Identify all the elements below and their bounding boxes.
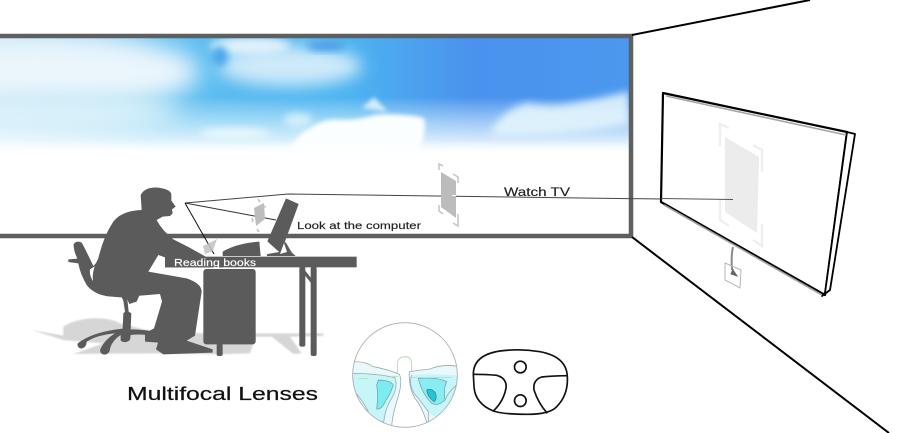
pedestal drawer — [203, 269, 256, 344]
room edges — [632, 0, 889, 433]
focus panel: far — [439, 164, 458, 226]
tv side edge — [822, 132, 855, 296]
right zone — [410, 366, 457, 422]
lens outline — [353, 323, 457, 427]
left zone — [353, 362, 400, 425]
lens zones outline — [473, 350, 567, 414]
focus panel: middle — [252, 199, 266, 232]
chair — [68, 242, 158, 355]
desk top — [165, 257, 357, 267]
power cable and socket — [725, 247, 741, 288]
person at desk silhouette — [68, 188, 357, 356]
sky through the window — [0, 38, 629, 148]
near zone marker — [397, 357, 412, 373]
computer monitor — [267, 198, 299, 253]
lens power map — [350, 323, 460, 428]
computer stand — [267, 242, 296, 256]
books — [223, 242, 261, 256]
tv front — [661, 93, 847, 295]
tv image panel — [661, 124, 762, 246]
white gap in monitor stand — [280, 243, 287, 254]
wall television — [661, 93, 855, 296]
label: watch TV: Watch TV — [504, 187, 570, 199]
sight lines — [185, 194, 733, 254]
label: reading books: Reading books — [174, 257, 256, 269]
label: look at the computer: Look at the computer — [297, 221, 422, 232]
floor shadow — [32, 318, 323, 354]
window frame — [0, 36, 631, 236]
title: Multifocal Lenses — [127, 384, 318, 404]
focus panel: near — [203, 239, 217, 254]
person body — [93, 188, 223, 354]
desk legs — [217, 267, 317, 356]
